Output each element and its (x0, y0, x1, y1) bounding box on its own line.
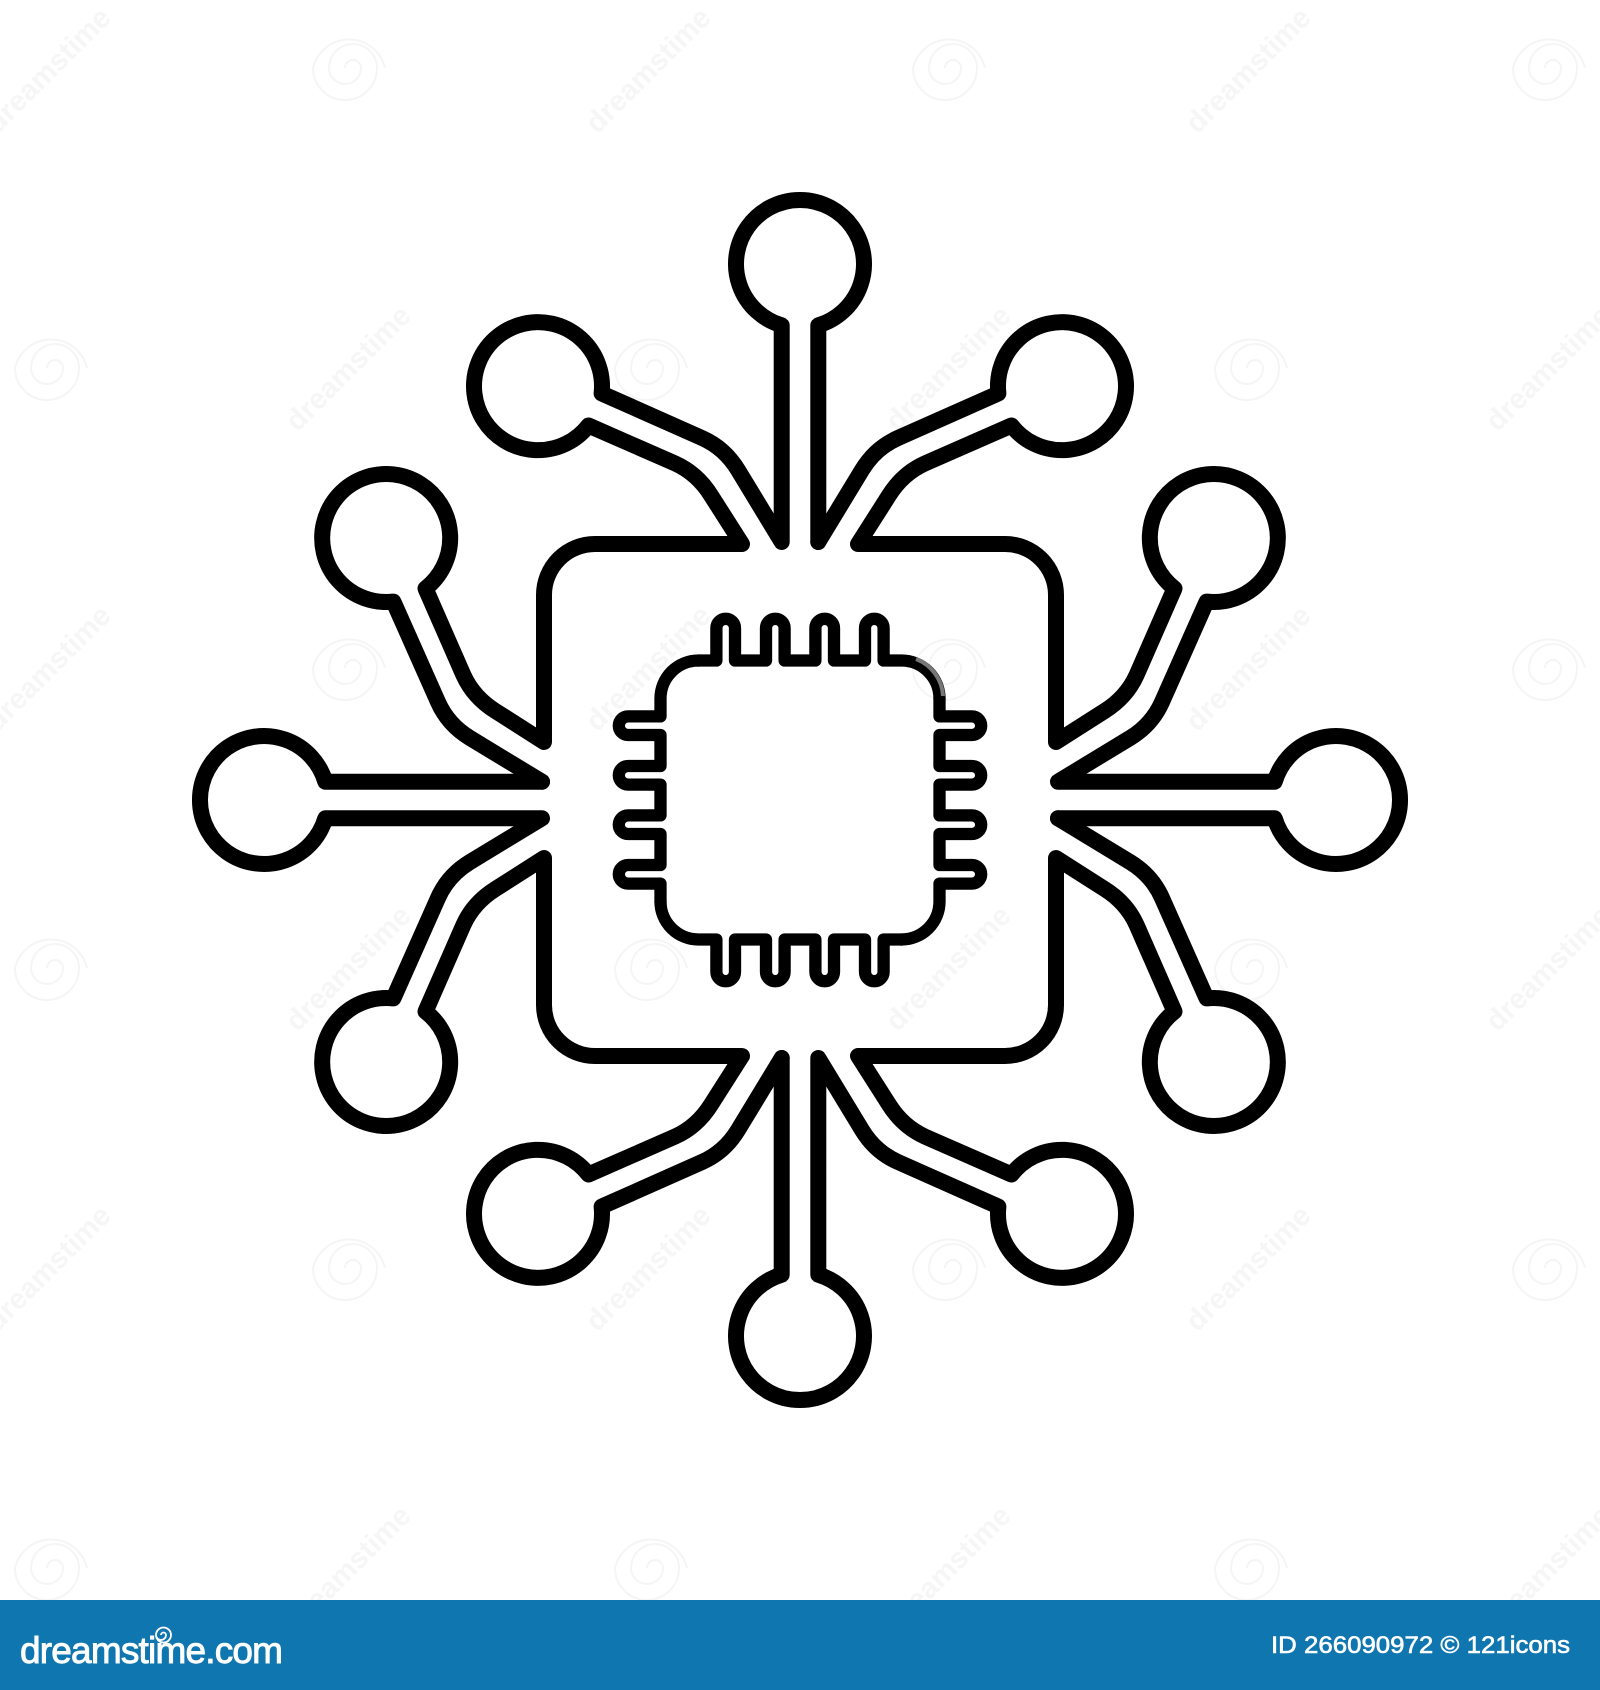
footer bar (0, 1600, 1600, 1690)
watermark pattern: dreamstime (280, 900, 418, 1038)
watermark pattern: dreamstime (880, 1500, 1018, 1638)
image id and credit: ID 266090972 © 121icons (1271, 1632, 1570, 1659)
watermark pattern: dreamstime (280, 1500, 418, 1638)
watermark pattern: dreamstime (280, 300, 418, 438)
icon: circuit board with chip and twelve nodes (200, 200, 1400, 1400)
watermark pattern: dreamstime (1180, 1200, 1318, 1338)
watermark pattern: dreamstime (880, 900, 1018, 1038)
watermark pattern: dreamstime (1180, 600, 1318, 738)
watermark pattern: dreamstime (580, 2, 718, 140)
inner microchip with pins (619, 619, 981, 981)
watermark pattern: dreamstime (1180, 2, 1318, 140)
watermark pattern: dreamstime (580, 1200, 718, 1338)
watermark pattern: dreamstime (880, 300, 1018, 438)
brand name: dreamstime.com (20, 1630, 283, 1671)
icon: dreamstime spiral (156, 1628, 171, 1643)
watermark pattern: dreamstime (580, 600, 718, 738)
outer board outline with connector traces and circular nodes (200, 200, 1400, 1400)
